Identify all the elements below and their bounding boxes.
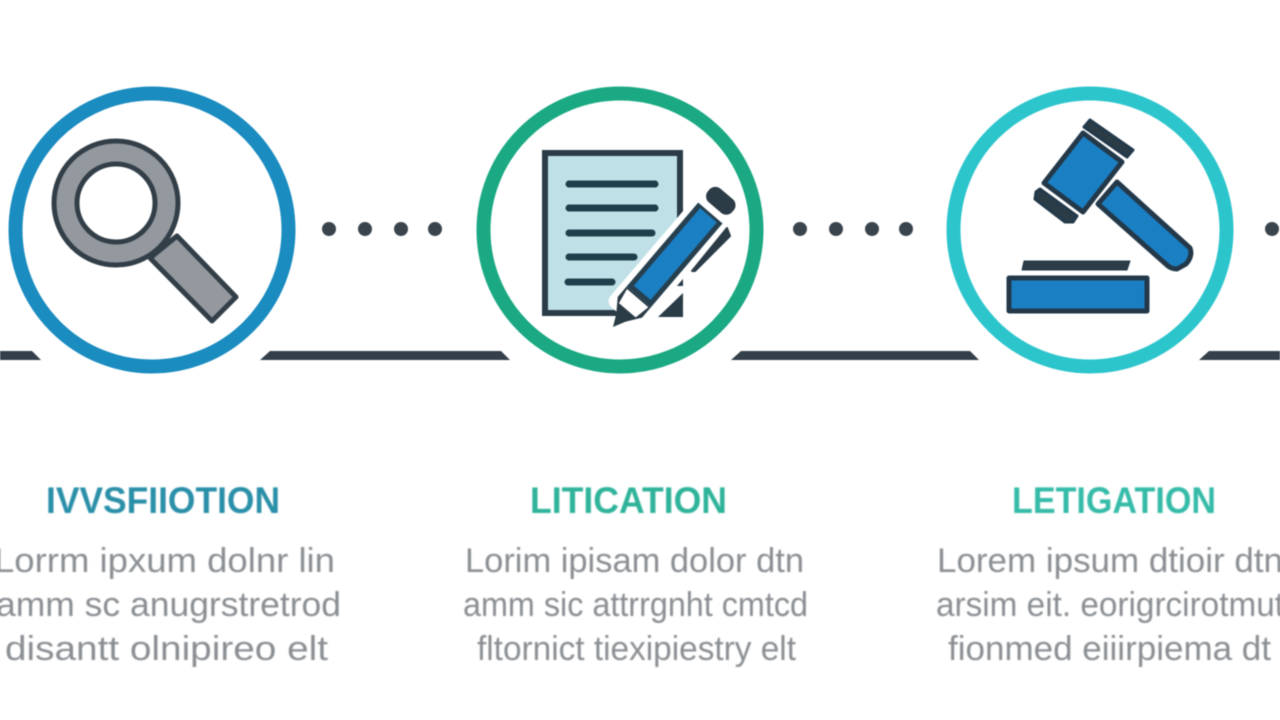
dotted connector: step 1 to step 2 <box>322 222 442 236</box>
icon: document with pen <box>545 153 754 348</box>
icon: magnifying glass <box>54 141 236 321</box>
text block: litigation description: fltornict tiexipiestry elt <box>477 630 797 668</box>
ring: litigation <box>484 94 756 366</box>
text block: investigation description <box>0 542 341 668</box>
text block: investigation description: amm sc anugrstretrod <box>0 586 341 624</box>
heading: letigation: LETIGATION <box>1012 480 1216 521</box>
text block: litigation description: amm sic attrrgnht cmtcd <box>463 586 808 624</box>
panel: investigation text <box>0 480 341 668</box>
timeline baseline <box>0 351 1280 360</box>
heading: litigation: LITICATION <box>530 480 727 521</box>
ring: investigation <box>16 94 288 366</box>
dotted connector: after step 3 <box>1265 222 1279 236</box>
text block: letigation description <box>936 542 1280 668</box>
dotted connector: step 2 to step 3 <box>793 222 913 236</box>
heading: investigation: IVVSFIIOTION <box>46 480 280 521</box>
icon: gavel and block <box>1009 120 1191 311</box>
text block: investigation description: Lorrm ipxum dolnr lin <box>0 542 335 580</box>
text block: letigation description: Lorem ipsum dtioir dtn <box>937 542 1280 580</box>
ring: letigation <box>954 94 1226 366</box>
panel: litigation text <box>463 480 808 668</box>
text block: litigation description <box>463 542 808 668</box>
panel: letigation text <box>936 480 1280 668</box>
text block: letigation description: fionmed eiiirpiema dt <box>948 630 1272 668</box>
text block: investigation description: disantt olnipireo elt <box>5 630 329 668</box>
text block: litigation description: Lorim ipisam dolor dtn <box>465 542 804 580</box>
